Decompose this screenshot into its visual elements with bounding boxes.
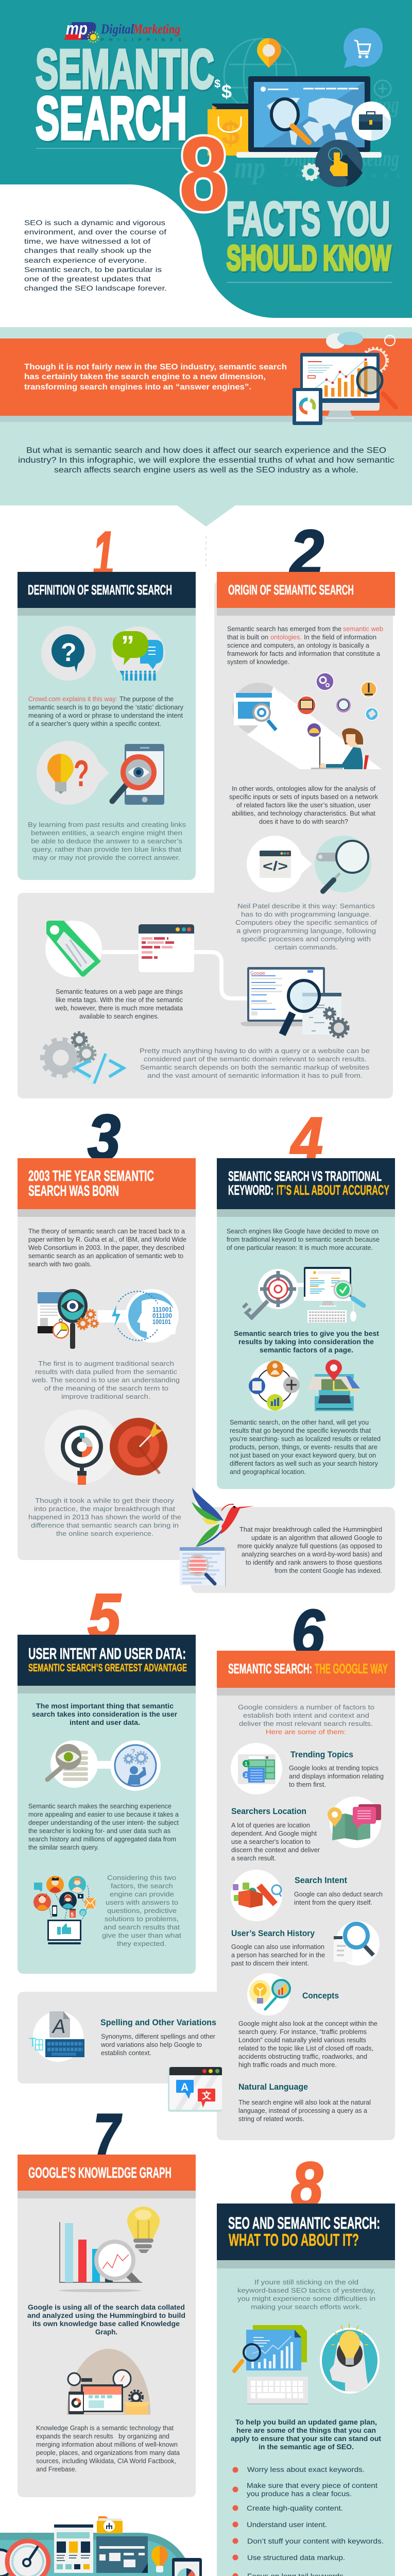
orange callout text: [24, 363, 287, 392]
goals text: The first is to augment traditional search: [38, 1360, 174, 1367]
origin text: framework for facts and information that constitute a: [227, 650, 381, 657]
keyword text: of one particular reason: It is much more accurate.: [227, 1244, 373, 1251]
item: natural language: language, instead of processing a query as a: [238, 2107, 368, 2114]
neil patel text: Neil Patel describe it this way: Semantics: [237, 902, 375, 910]
two factors text: engine can provide: [110, 1890, 174, 1898]
panel: header hero: [0, 0, 412, 327]
hummingbird text: update is an algorithm that allowed Google to: [251, 1534, 382, 1541]
item: trending topics: 1: [245, 1761, 248, 1767]
knowledge graph lead text: Google is using all of the search data collated: [28, 2303, 185, 2311]
number 8: 8: [291, 2149, 323, 2221]
header bar: [217, 1651, 395, 1688]
panel: fact 7 knowledge graph: [18, 2101, 196, 2497]
title: semantic search: SEARCH: [36, 84, 187, 152]
header bar: SEARCH WAS BORN: [28, 1183, 119, 1199]
illustration: eye magnifier and head: 011100: [152, 1312, 172, 1319]
illustration: gear magnifier and dart target: [44, 1410, 167, 1485]
old tactics text: If youre still sticking on the old: [254, 2278, 358, 2286]
illustration: analytics dashboard: [0, 2516, 202, 2576]
hummingbird text: [237, 1526, 382, 1574]
checklist: Use structured data markup.: [247, 2554, 345, 2562]
origin text: system of knowledge.: [227, 658, 289, 666]
item: searchers location: use a searcher's location to: [231, 1838, 311, 1845]
neil patel text: certain commands.: [274, 943, 338, 951]
illustration: eye magnifier and head: [38, 1289, 179, 1349]
semantic domain text: and the vast amount of semantic information it has to pull from.: [147, 1072, 363, 1079]
definition text: Crowd.com explains it this way:: [28, 695, 117, 703]
semantic tries text: [234, 1330, 380, 1354]
theory text: Web Consortium in 2003. In the paper, they described: [28, 1244, 184, 1251]
hummingbird text: more quickly analyze full questions (as opposed to: [237, 1542, 382, 1550]
icon: hummingbird: [192, 1487, 254, 1547]
item: natural language: [238, 2082, 371, 2123]
two factors text: solutions to problems,: [105, 1915, 179, 1923]
illustration: factors ring and map typewriter: [249, 1360, 360, 1411]
intro question text: [18, 446, 394, 474]
panel: fact 4 semantic vs keyword: [217, 1105, 395, 1489]
knowledge graph text: and Freebase.: [36, 2465, 77, 2473]
icon: tag and code window: [45, 921, 194, 977]
checklist: Worry less about exact keywords.: [247, 2466, 365, 2473]
goals text: improve traditional search.: [61, 1393, 150, 1400]
illustration: laptop and search: $: [221, 114, 240, 151]
icon: question and quote bubbles: [41, 626, 165, 681]
header bar: KEYWORD:: [228, 1182, 273, 1198]
semantic features text: web, however, there is much more metadata: [55, 1004, 183, 1012]
item: concepts: related to the topic like List of closed off roads,: [238, 2044, 373, 2052]
checklist: Create high-quality content.: [247, 2504, 343, 2512]
panel: fact 8 seo what to do: [217, 2149, 395, 2576]
hummingbird text: to identify and rank answers to those questions: [246, 1558, 382, 1566]
intro question text: industry? In this infographic, we will explore the essential truths of what and how semantic: [18, 456, 394, 465]
title: semantic search: SEMANTIC: [36, 38, 214, 100]
illustration: social users and laptop: @: [80, 1910, 85, 1916]
definition text: of a searcher’s query within a specific context.: [28, 720, 161, 727]
illustration: social users and laptop: [33, 1876, 95, 1944]
goals text: web. The second is to use an understanding: [31, 1376, 180, 1384]
semantic search explanation text: be able to deduce the answer to a searcher’s: [31, 837, 183, 845]
connector line: [102, 952, 247, 998]
number 2: 2: [289, 517, 324, 589]
item: user's search history: [231, 1921, 380, 1967]
checklist: Make sure that every piece of content: [247, 2482, 377, 2489]
breakthrough text: the online search experience.: [56, 1530, 153, 1537]
two factors text: Considering this two: [107, 1874, 176, 1882]
item: concepts: London” could naturally yield various results: [238, 2036, 366, 2044]
searching experience text: the similar search query.: [28, 1843, 99, 1851]
orange callout text: Though it is not fairly new in the SEO industry, semantic search: [24, 363, 287, 371]
semantic tries text: semantic factors of a page.: [260, 1346, 353, 1354]
keyword text: Search engines like Google have decided to move on: [227, 1227, 379, 1235]
panel: fact 1 definition: [18, 519, 196, 880]
knowledge graph lead text: [27, 2303, 185, 2336]
knowledge graph text: Knowledge Graph is a semantic technology that: [36, 2424, 174, 2432]
intro text: time, we have witnessed a lot of: [24, 237, 150, 245]
panel: mint intro band: [0, 327, 412, 527]
user intent lead text: search takes into consideration is the user: [32, 1710, 178, 1718]
panel: fact 3 2003: [18, 1102, 196, 1560]
neil patel text: specific processes and complying with: [241, 935, 371, 943]
user intent lead text: [32, 1702, 178, 1726]
keyword text: from traditional keyword to semantic search because: [227, 1235, 380, 1243]
illustration: laptop google results and gears: [241, 967, 348, 1037]
other hand text: different factors as well such as your search history: [230, 1460, 378, 1467]
orange callout text: transforming search engines into an “answer engines”.: [24, 383, 251, 392]
watermark: mp: [234, 89, 265, 123]
number 1: 1: [93, 519, 114, 590]
icon: question and quote bubbles: ”: [121, 631, 134, 660]
illustration: laptop google results and gears: Google: [250, 971, 265, 976]
number 5: 5: [88, 1581, 121, 1653]
definition text: semantic search is to go beyond the ‘static’ dictionary: [28, 703, 183, 711]
origin text: semantic web: [343, 625, 383, 633]
breakthrough text: [28, 1497, 181, 1537]
intro text: one of the greatest updates that: [24, 275, 151, 283]
knowledge graph text: merging information about millions of well-known: [36, 2441, 178, 2448]
hummingbird text: That major breakthrough called the Hummingbird: [239, 1526, 382, 1533]
user intent lead text: The most important thing that semantic: [36, 1702, 174, 1710]
title: semantic search: [36, 38, 214, 152]
checklist: Understand user intent.: [247, 2521, 327, 2529]
panel: closing teal section: [0, 2516, 412, 2576]
illustration: target key and monitor: [243, 1267, 364, 1323]
ontology explanation text: In other words, ontologies allow for the analysis of: [232, 785, 375, 792]
icon: code window and magnifier: </>: [263, 858, 288, 874]
semantic search explanation text: may or may not provide the correct answer.: [33, 854, 180, 861]
item: natural language: string of related words.: [238, 2115, 304, 2123]
number 6: 6: [291, 1597, 325, 1669]
goals text: [31, 1360, 180, 1400]
item: concepts: [238, 1973, 377, 2069]
number 4: 4: [289, 1105, 323, 1176]
header bar: [217, 572, 395, 608]
illustration: laptop and search: $: [221, 81, 232, 102]
panel: fact 2 origin: [18, 517, 395, 1098]
illustration: laptop and search: $: [214, 77, 220, 90]
panel: fact 6 google way: [18, 1597, 395, 2140]
icon: gears and code: [43, 1032, 124, 1084]
neil patel text: [235, 902, 377, 951]
item: concepts: search query. For instance, “traffic problems: [238, 2028, 367, 2036]
google factors intro: Google considers a number of factors to: [238, 1703, 374, 1711]
google factors intro: establish both intent and context and: [243, 1711, 369, 1719]
intro text: search experience of everyone.: [24, 256, 147, 264]
logo: [64, 19, 181, 42]
searching experience text: Semantic search makes the searching experience: [28, 1802, 171, 1810]
logo: Marketing: [132, 22, 180, 37]
hummingbird text: analyzing searches on a word-by-word basis) and: [242, 1550, 382, 1558]
keyword text: [227, 1227, 380, 1251]
intro text: SEO is such a dynamic and vigorous: [24, 218, 165, 227]
intro text: changed the SEO landscape forever.: [24, 284, 167, 292]
intro text: [24, 218, 167, 292]
origin text: that is built on: [227, 633, 268, 641]
watermark: mp: [234, 150, 265, 184]
hummingbird text: from the content Google has indexed.: [274, 1567, 382, 1574]
item: spelling and other variations: Spelling and Other Variations: [100, 2018, 216, 2027]
intro text: environment, and over the course of: [24, 228, 166, 236]
semantic features text: available to search engines.: [79, 1012, 159, 1020]
item: concepts: Google might also look at the concept within the: [238, 2020, 377, 2027]
item: trending topics: Trending Topics: [290, 1750, 353, 1759]
ontology explanation text: abilities, and technology characteristics. But what: [232, 809, 375, 817]
searching experience text: deeper understanding of the user intent- the subject: [28, 1819, 179, 1826]
other hand text: [230, 1418, 381, 1476]
icon: translate window: [168, 2067, 222, 2112]
item: spelling and other variations: Synonyms, different spellings and other: [101, 2032, 216, 2040]
icon: search result page: [180, 1547, 226, 1586]
item: concepts: accidents obstructing traffic, roadworks, and: [238, 2053, 367, 2060]
origin text: In the field of information: [304, 633, 376, 641]
item: natural language: Natural Language: [238, 2082, 308, 2092]
item: search intent: intent from the query itself.: [294, 1899, 372, 1906]
illustration: eye magnifier and head: 111001: [152, 1306, 172, 1313]
breakthrough text: difference that semantic search can bring in: [31, 1521, 179, 1529]
item: trending topics: [231, 1743, 384, 1794]
definition text: meaning of a word or phrase to understand the intent: [28, 711, 183, 719]
goals text: of the meaning of the search term to: [44, 1384, 168, 1392]
semantic domain text: considered part of the semantic domain relevant to search results.: [144, 1055, 367, 1063]
game plan text: To help you build an updated game plan,: [235, 2418, 377, 2426]
intro text: changes that really shook up the: [24, 246, 151, 255]
origin text: science and computers, an ontology is basically a: [227, 641, 370, 649]
two factors text: they expected.: [117, 1940, 166, 1947]
searching experience text: the searcher is looking for- and user data such as: [28, 1827, 170, 1835]
other hand text: you’re searching- such as localized results or related: [230, 1435, 381, 1443]
theory text: search with two goals.: [28, 1260, 92, 1268]
illustration: eye magnifier and head: 100101: [152, 1318, 171, 1326]
two factors text: and search results that: [104, 1923, 180, 1931]
item: search intent: [231, 1870, 383, 1921]
item: trending topics: and displays information relating: [289, 1772, 384, 1780]
google factors intro: Here are some of them:: [266, 1728, 346, 1736]
neil patel text: has to do with programming language.: [241, 910, 371, 918]
item: spelling and other variations: [29, 2011, 216, 2062]
header bar: [217, 2204, 395, 2260]
breakthrough text: happened in 2013 has shown the world of the: [28, 1513, 181, 1521]
item: concepts: Concepts: [302, 1991, 339, 2001]
semantic tries text: Semantic search tries to give you the best: [234, 1330, 380, 1337]
item: searchers location: dependent. And Google might: [231, 1829, 317, 1837]
searching experience text: more appealing and easier to use because it takes a: [28, 1810, 179, 1818]
header bar: [217, 1158, 395, 1209]
header bar: [18, 1635, 196, 1686]
item: searchers location: [231, 1797, 381, 1862]
checklist: you produce has a clear focus.: [247, 2490, 352, 2498]
header bar: 2003 THE YEAR SEMANTIC: [28, 1168, 154, 1184]
item: searchers location: Searchers Location: [231, 1806, 306, 1816]
ontology explanation text: [229, 785, 378, 825]
logo: Digital: [100, 22, 134, 37]
item: trending topics: 2: [245, 1773, 248, 1778]
semantic search explanation text: query, rather than provide ten blue links that: [32, 845, 181, 853]
checklist: [233, 2466, 384, 2576]
item: concepts: high traffic roads and much more.: [238, 2061, 337, 2069]
semantic features text: like meta tags. With the rise of the semantic: [56, 996, 183, 1004]
two factors text: [102, 1874, 181, 1947]
definition text: [28, 695, 183, 727]
semantic search explanation text: between entities, a search engine might then: [31, 829, 182, 837]
semantic features text: Semantic features on a web page are things: [56, 988, 183, 995]
icon: question and quote bubbles: ?: [61, 638, 77, 667]
knowledge graph text: sources, including Wikidata, CIA World Factbook,: [36, 2457, 176, 2465]
breakthrough text: Though it took a while to get their theory: [35, 1497, 175, 1504]
illustration: devices on beige egg: [67, 2349, 150, 2415]
item: spelling and other variations: T: [29, 2036, 37, 2049]
item: spelling and other variations: word variations also help Google to: [100, 2041, 202, 2048]
number 7: 7: [93, 2101, 122, 2173]
game plan text: here are some of the things that you can: [236, 2427, 376, 2434]
orange callout text: has certainly taken the search engine to a new dimension,: [24, 372, 266, 381]
item: user's search history: past to discern their intent.: [231, 1959, 309, 1967]
header bar: [18, 572, 196, 608]
other hand text: results that go beyond the specific keywords that: [230, 1427, 371, 1434]
checklist: Don’t stuff your content with keywords.: [247, 2537, 384, 2545]
header bar: SEMANTIC SEARCH’S GREATEST ADVANTAGE: [28, 1662, 187, 1674]
searching experience text: search history and millions of aggregated data from: [28, 1835, 176, 1843]
title: facts you should know: [227, 193, 392, 283]
icon: eye magnifier and thinker: [47, 1740, 161, 1791]
intro text: Semantic search, to be particular is: [24, 265, 162, 274]
other hand text: and geographical location.: [230, 1468, 306, 1476]
ontology explanation text: does it have to do with search?: [259, 818, 348, 825]
watermark: [234, 89, 400, 184]
google factors intro: deliver the most relevant search results.: [239, 1720, 373, 1727]
neil patel text: a given programming language, following: [236, 927, 376, 935]
item: searchers location: a search result.: [231, 1854, 276, 1862]
knowledge graph lead text: Graph.: [95, 2328, 117, 2336]
icon: bulb, question mark and phone: ?: [74, 753, 89, 794]
other hand text: not just based on your exact keyword query, but on: [230, 1451, 376, 1459]
knowledge graph lead text: and analyzed using the Hummingbird to build: [27, 2312, 185, 2319]
semantic domain text: Pretty much anything having to do with a query or a website can be: [140, 1047, 370, 1055]
knowledge graph lead text: its own knowledge base called Knowledge: [32, 2320, 180, 2328]
definition text: The purpose of the: [119, 695, 174, 703]
intro question text: But what is semantic search and how does it affect our search experience and the SEO: [26, 446, 386, 455]
theory text: The theory of semantic search can be traced back to a: [28, 1227, 185, 1235]
knowledge graph text: [36, 2424, 180, 2473]
semantic domain text: [140, 1047, 370, 1079]
semantic search explanation text: By learning from past results and creating links: [28, 821, 186, 828]
illustration: monitor, tablet and analytics: [293, 332, 396, 425]
header bar: DEFINITION OF SEMANTIC SEARCH: [28, 582, 172, 598]
item: user's search history: User’s Search History: [231, 1928, 315, 1938]
ontology explanation text: of related factors like the user’s situation, user: [236, 801, 371, 809]
other hand text: Semantic search, on the other hand, will get you: [230, 1418, 369, 1426]
item: natural language: The search engine will also look at the natural: [238, 2098, 371, 2106]
two factors text: factors, the search: [111, 1882, 173, 1890]
semantic domain text: Semantic search depends on both the semantic markup of websites: [140, 1063, 370, 1071]
theory text: [28, 1227, 186, 1268]
item: trending topics: Google looks at trending topics: [289, 1764, 379, 1772]
item: searchers location: A lot of queries are location: [231, 1821, 310, 1829]
old tactics text: [237, 2278, 375, 2311]
header bar: [18, 2155, 196, 2191]
illustration: report, keyboard and head: [234, 2324, 379, 2404]
illustration: laptop and search: [208, 28, 391, 187]
origin text: Semantic search has emerged from the: [227, 625, 341, 633]
origin text: [227, 625, 383, 666]
user intent lead text: intent and user data.: [70, 1719, 140, 1726]
item: user's search history: a person has searched for in the: [231, 1951, 325, 1959]
semantic features text: [55, 988, 183, 1020]
game plan text: apply to ensure that your site can stand out: [231, 2435, 382, 2443]
illustration: chart bars bulb and magnifier: [59, 2207, 160, 2292]
logo: mp: [66, 19, 88, 39]
theory text: semantic search as an application of semantic web to: [28, 1252, 183, 1260]
old tactics text: keyword-based SEO tactics of yesterday,: [237, 2286, 375, 2294]
theory text: paper written by R. Guha et al., of IBM, and World Wide: [28, 1235, 186, 1243]
panel: fact 5 user intent: [18, 1581, 196, 1974]
panel: hummingbird update: [180, 1487, 395, 1593]
semantic tries text: results by taking into consideration the: [238, 1338, 374, 1346]
header bar: GOOGLE’S KNOWLEDGE GRAPH: [28, 2165, 171, 2181]
icon: code window and magnifier: [247, 836, 371, 892]
intro question text: search affects search engine users as well as the SEO industry as a whole.: [54, 466, 358, 474]
item: searchers location: discern the context and deliver: [231, 1846, 320, 1854]
item: user's search history: Google can also use information: [231, 1943, 324, 1951]
illustration: social users and laptop: 5: [71, 1912, 74, 1918]
semantic search explanation text: [28, 821, 186, 861]
icon: translate window: 文: [202, 2090, 211, 2101]
item: search intent: Search Intent: [295, 1875, 347, 1885]
neil patel text: Computers obey the specific semantics of: [235, 919, 377, 926]
goals text: results with data pulled from the semantic: [35, 1368, 178, 1376]
icon: eye magnifier and thinker: ?: [131, 1748, 135, 1755]
item: spelling and other variations: A: [52, 2016, 65, 2038]
item: search intent: Google can also deduct search: [294, 1890, 383, 1898]
old tactics text: you might experience some difficulties in: [237, 2295, 375, 2302]
header bar: SEMANTIC SEARCH:: [228, 1661, 312, 1676]
searching experience text: [28, 1802, 179, 1851]
header bar: [18, 1158, 196, 1209]
item: spelling and other variations: establish context.: [101, 2049, 151, 2057]
old tactics text: making your search efforts work.: [251, 2303, 362, 2311]
icon: bulb, question mark and phone: [37, 741, 164, 805]
two factors text: give the user than what: [102, 1931, 181, 1939]
knowledge graph text: people, places, and organizations from many data: [36, 2449, 180, 2456]
two factors text: questions, predictive: [107, 1907, 177, 1914]
illustration: person searching ontology icons: [232, 673, 382, 769]
google factors intro: [238, 1703, 374, 1736]
watermark: PHILIPPINES: [284, 172, 400, 179]
game plan text: in the semantic age of SEO.: [259, 2443, 354, 2451]
two factors text: users with answers to: [106, 1899, 178, 1906]
game plan text: [231, 2418, 382, 2451]
other hand text: products, person, things, or events- results that are: [230, 1443, 377, 1451]
origin text: ontologies.: [270, 633, 302, 641]
ontology explanation text: specific inputs or sets of inputs based on a network: [229, 793, 378, 801]
number 3: 3: [88, 1102, 121, 1174]
icon: translate window: A: [181, 2081, 188, 2093]
big number 8: 8: [179, 115, 228, 233]
logo: PHILIPPINES: [101, 37, 181, 42]
header bar: USER INTENT AND USER DATA:: [28, 1645, 186, 1663]
breakthrough text: into practice, the major breakthrough that: [34, 1505, 175, 1513]
knowledge graph text: expands the search results by organizing and: [36, 2432, 169, 2440]
item: trending topics: to them first.: [289, 1781, 326, 1788]
